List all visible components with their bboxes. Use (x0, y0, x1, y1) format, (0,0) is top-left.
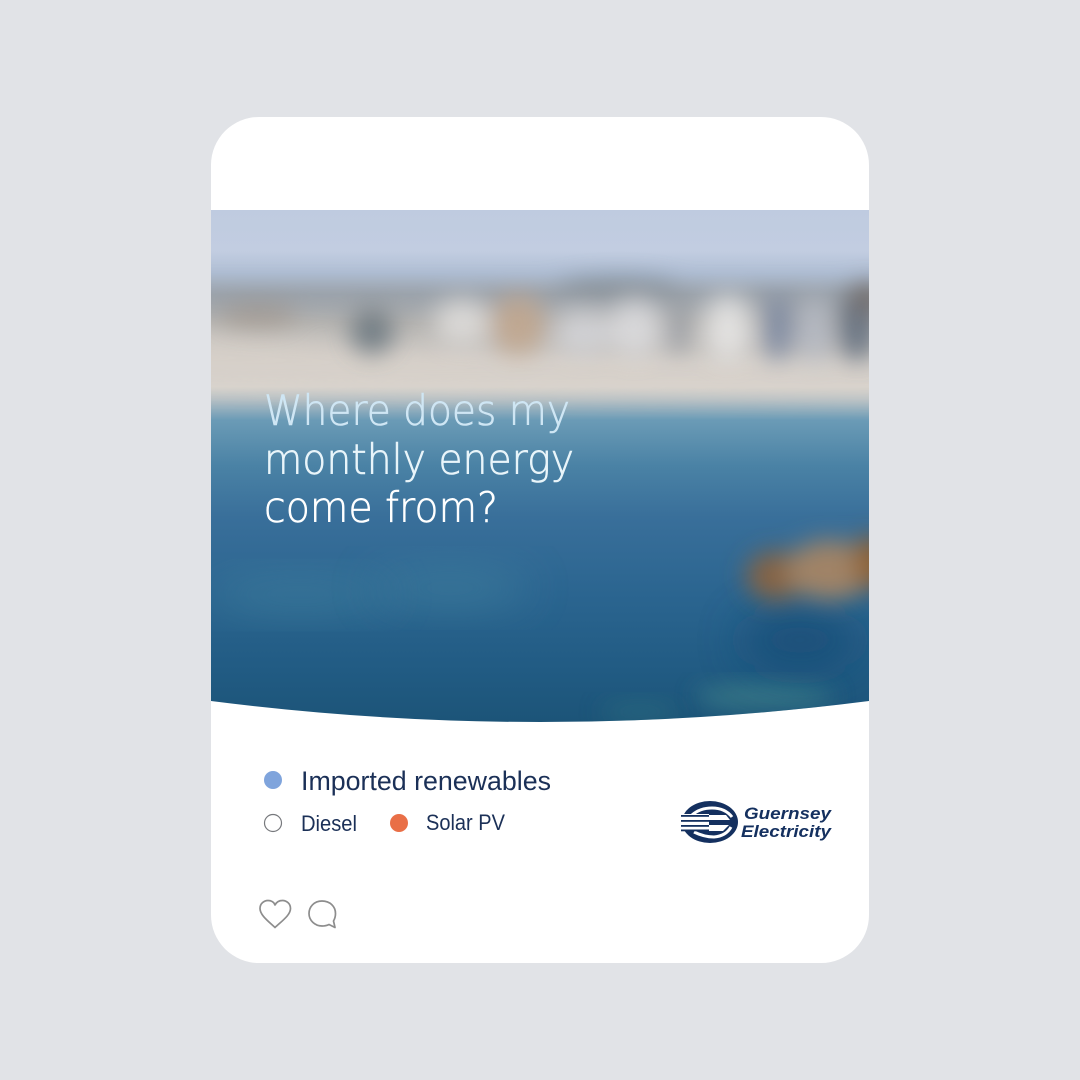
icon: comment bubble (309, 901, 336, 928)
card background (211, 117, 869, 963)
legend: diesel: Diesel (301, 811, 357, 836)
blurred houses on the shore (180, 277, 900, 362)
infographic card (211, 117, 869, 963)
heading: Where does my (264, 386, 570, 435)
icon: heart (260, 900, 290, 928)
blurred sand (150, 330, 930, 392)
logo: Guernsey Electricity (678, 801, 833, 843)
blurred water highlights (205, 572, 860, 722)
heading: come from? (264, 483, 498, 532)
legend: solar PV: Solar PV (426, 810, 505, 835)
logo wordmark: Guernsey (744, 804, 833, 823)
legend: solar PV (390, 810, 505, 835)
blurred rock (746, 534, 890, 601)
heading (264, 386, 574, 532)
logo mark (678, 801, 738, 843)
logo wordmark: Electricity (741, 822, 833, 841)
heading: monthly energy (264, 435, 574, 484)
legend: diesel (264, 811, 357, 836)
legend: imported renewables: Imported renewables (301, 766, 551, 796)
blurred coastal photo (211, 210, 869, 722)
logo wordmark (741, 804, 833, 841)
